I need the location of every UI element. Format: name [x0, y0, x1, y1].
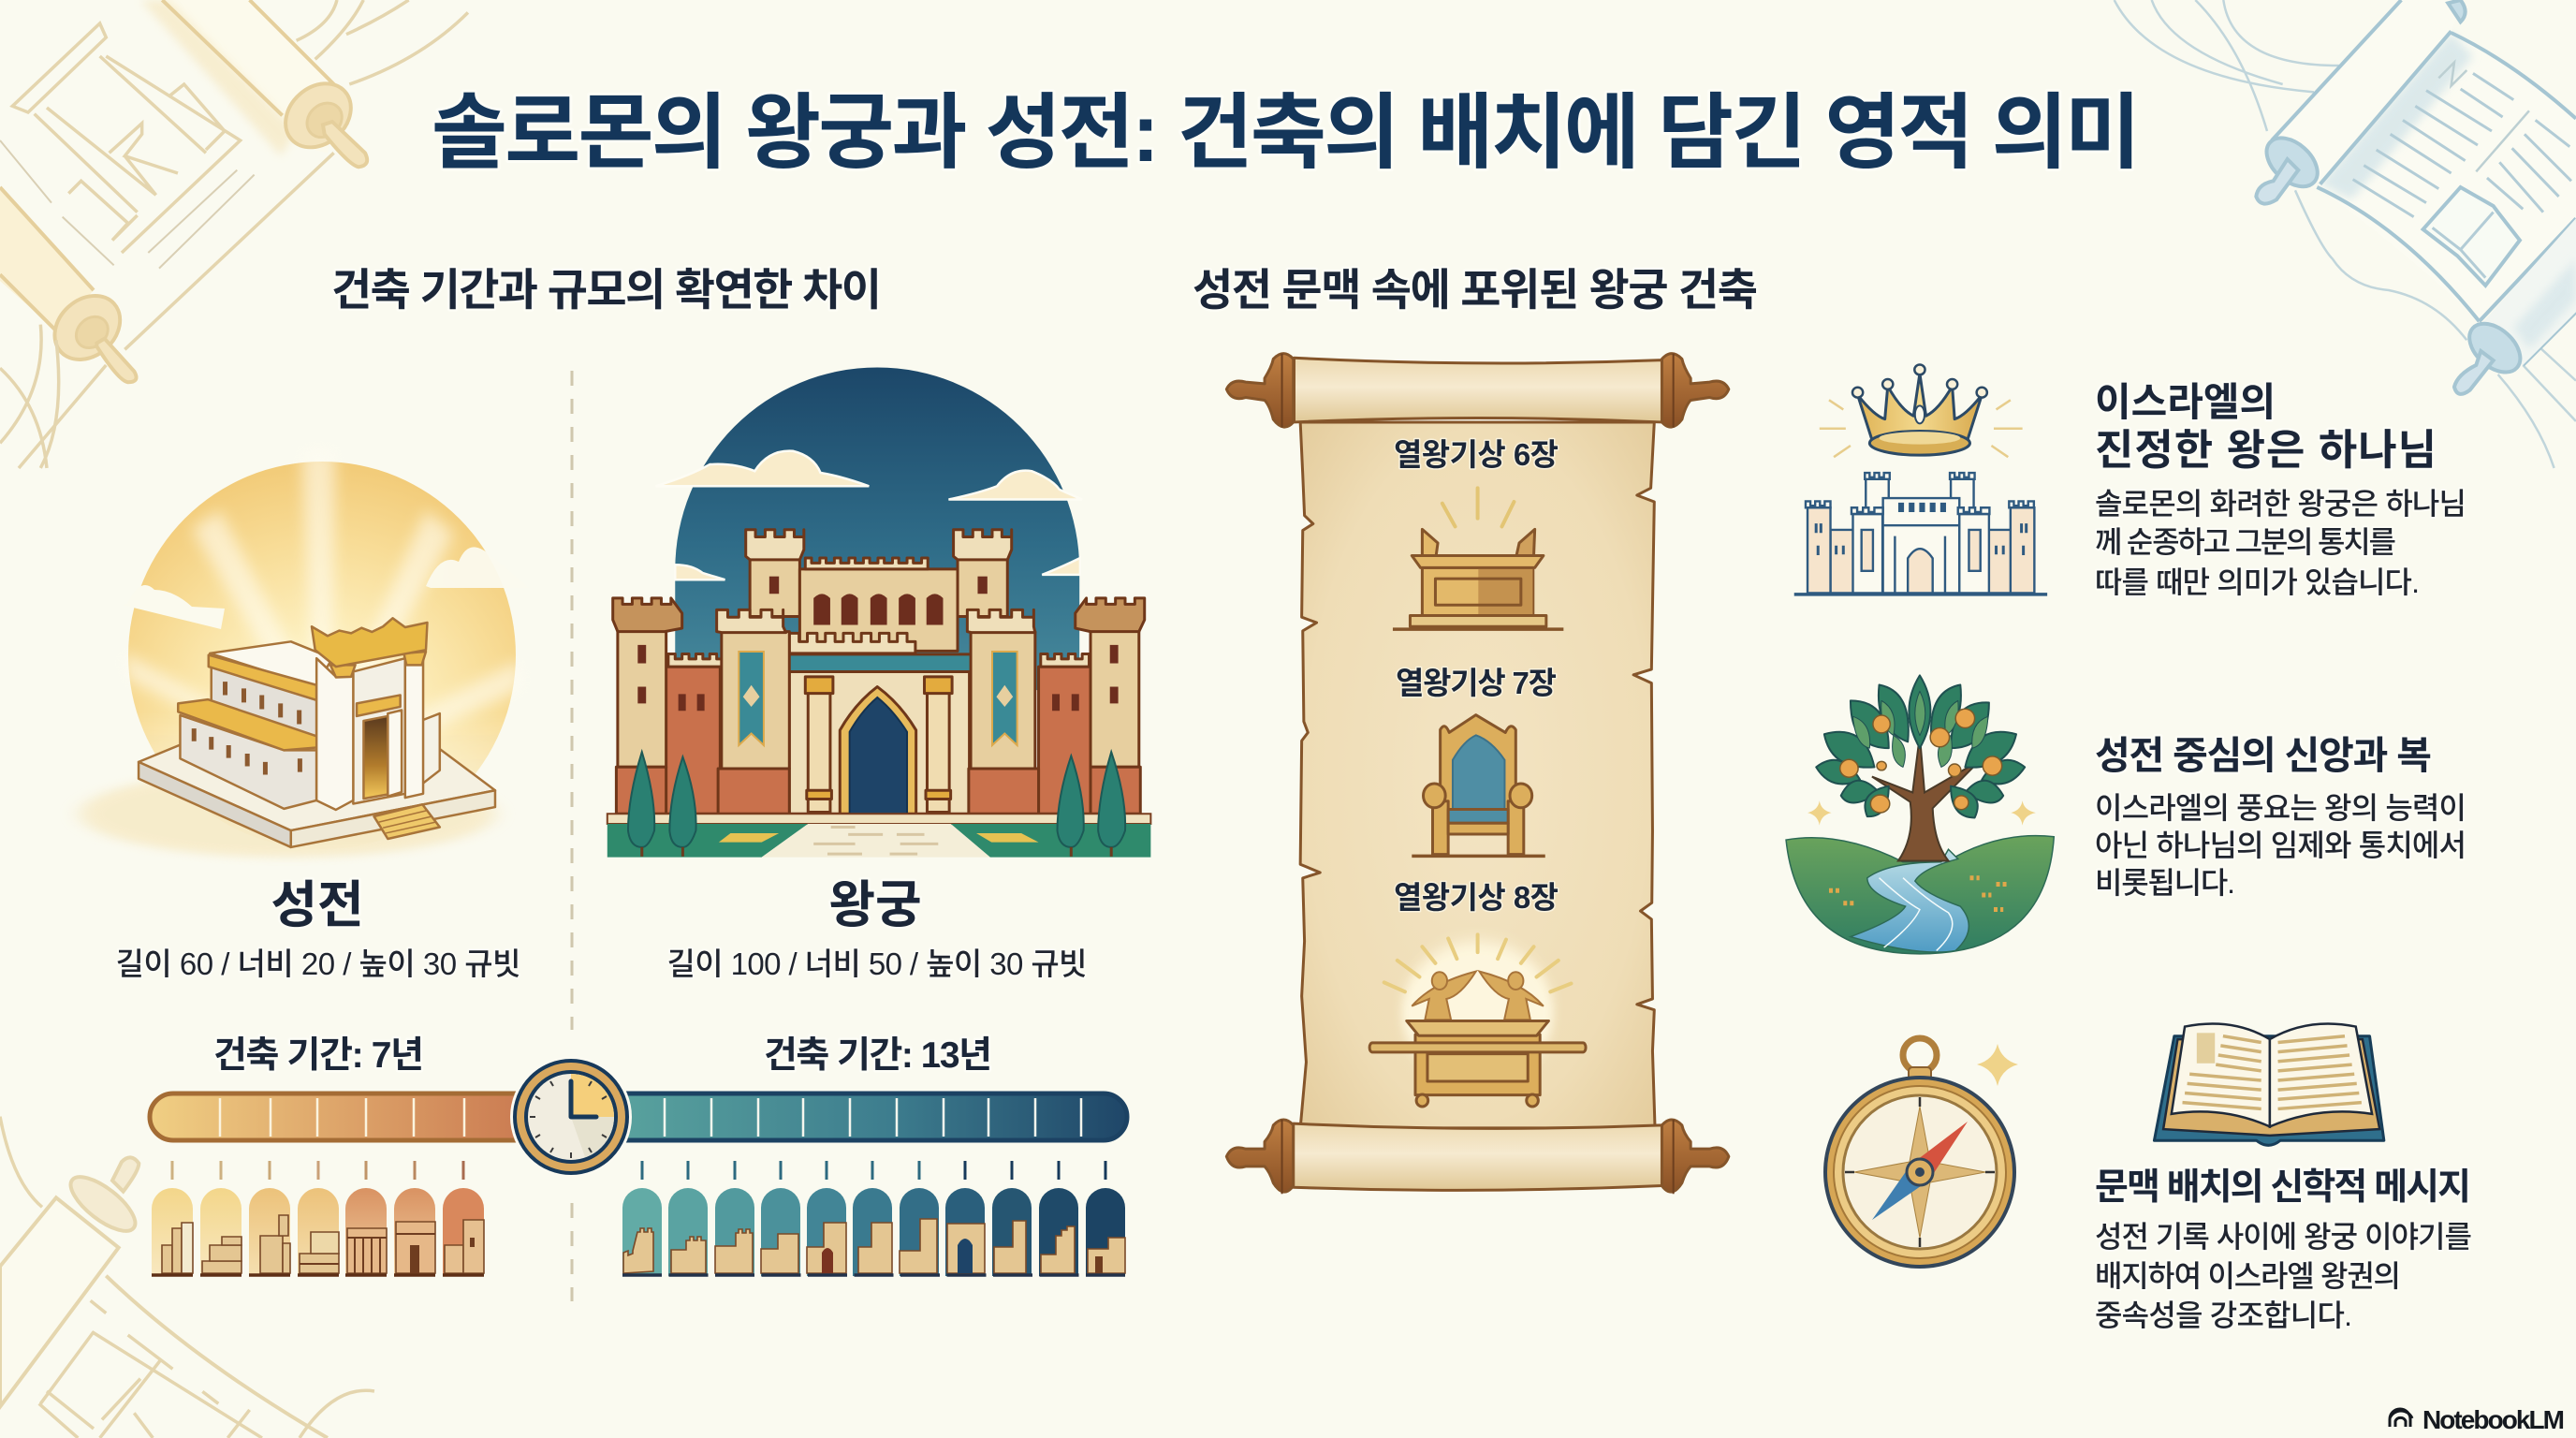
bar: seven year timeline	[150, 1093, 543, 1140]
text: temple centered faith	[2095, 734, 2466, 900]
label: temple build time: 건축 기간: 7년	[213, 1035, 424, 1076]
center dashed divider	[571, 371, 573, 1301]
logo	[2390, 1409, 2412, 1427]
arch backgrounds	[152, 1188, 484, 1276]
year tick marks	[172, 1161, 463, 1180]
platform	[139, 724, 495, 847]
center block	[789, 558, 958, 653]
palace dimensions: 길이 100 / 너비 50 / 높이 30 규빗	[666, 946, 1088, 981]
icon: clock	[510, 1056, 632, 1178]
palace year tiles	[622, 1161, 1125, 1276]
icon: ark of covenant	[1369, 934, 1586, 1107]
description	[2095, 791, 2466, 900]
clouds around sun	[122, 585, 225, 629]
upper block	[209, 641, 332, 741]
arch backgrounds	[622, 1188, 1125, 1276]
bar: thirteen year timeline	[599, 1093, 1127, 1140]
trunk	[1872, 736, 1980, 860]
side walls	[665, 654, 1090, 814]
chapter 8: 열왕기상 8장	[1394, 880, 1559, 915]
decoration: bottom-left plan scroll	[0, 1117, 374, 1438]
fruit	[1840, 709, 2002, 813]
hills	[1786, 836, 2054, 954]
illustration: palace	[607, 367, 1150, 858]
description: 비롯됩니다.	[2095, 866, 2235, 900]
description: 따를 때만 의미가 있습니다.	[2095, 565, 2420, 599]
upper towers	[746, 530, 1012, 617]
description	[2095, 1220, 2472, 1332]
lower block	[178, 699, 318, 809]
chapter 6: 열왕기상 6장	[1394, 437, 1559, 472]
heading line two: 진정한 왕은 하나님	[2095, 426, 2437, 474]
scroll: kings chapters 6 to 8	[1226, 354, 1729, 1194]
clouds	[656, 451, 1082, 580]
scroll chapter labels	[1394, 437, 1559, 915]
sun rays	[122, 449, 524, 758]
meadow flowers	[1829, 878, 2008, 910]
decoration: top-left blueprint scroll	[0, 0, 468, 468]
wordmark: NotebookLM	[2422, 1405, 2565, 1434]
castle outline	[1806, 473, 2034, 594]
text: theological message	[2095, 1167, 2472, 1332]
year tick marks	[642, 1161, 1105, 1180]
heading: temple context: 성전 문맥 속에 포위된 왕궁 건축	[1193, 265, 1758, 315]
growing palace buildings	[623, 1219, 1125, 1273]
crown	[1852, 364, 1987, 455]
icon: fruit tree and river	[1786, 675, 2054, 954]
description	[2095, 487, 2466, 599]
sparkles	[1808, 800, 2036, 826]
watermark: NotebookLM	[2390, 1405, 2565, 1434]
icon: crown over castle	[1794, 364, 2047, 594]
mid towers	[717, 609, 1039, 814]
growing temple buildings	[162, 1215, 484, 1273]
description: 중속성을 강조합니다.	[2095, 1299, 2352, 1332]
rays	[1820, 400, 2023, 457]
temple name: 성전	[271, 877, 364, 933]
temple dimensions: 길이 60 / 너비 20 / 높이 30 규빗	[116, 946, 520, 981]
heading: 이스라엘의	[2095, 380, 2276, 424]
sun disc	[128, 462, 516, 849]
icon: open book	[2154, 1024, 2384, 1145]
cypress trees	[628, 752, 1125, 857]
temple year tiles	[152, 1161, 484, 1276]
title: 솔로몬의 왕궁과 성전: 건축의 배치에 담긴 영적 의미	[432, 86, 2141, 179]
text: true king	[2095, 380, 2466, 599]
description: 솔로몬의 화려한 왕궁은 하나님	[2095, 487, 2466, 521]
gate	[787, 654, 972, 814]
sky dome	[675, 367, 1079, 690]
palace name: 왕궁	[828, 877, 922, 933]
bottom roller	[1226, 1120, 1729, 1194]
icon: throne	[1412, 715, 1545, 856]
baseline	[152, 1273, 484, 1277]
soft ground shadow	[80, 770, 495, 858]
label: palace	[666, 877, 1088, 981]
description: 이스라엘의 풍요는 왕의 능력이	[2095, 791, 2466, 825]
icon: altar	[1393, 488, 1563, 629]
label: temple	[116, 877, 520, 981]
icon: compass	[1825, 1038, 2014, 1267]
baseline	[622, 1273, 1125, 1277]
description: 배지하여 이스라엘 왕권의	[2095, 1259, 2401, 1293]
heading: 문맥 배치의 신학적 메시지	[2095, 1167, 2471, 1208]
river	[1851, 849, 1969, 952]
foliage	[1816, 675, 2025, 817]
description: 아닌 하나님의 임제와 통치에서	[2095, 829, 2466, 862]
parchment	[1300, 422, 1655, 1128]
icon: sparkle	[1977, 1044, 2018, 1086]
top roller	[1226, 354, 1729, 428]
heading: construction comparison: 건축 기간과 규모의 확연한 차이	[331, 265, 882, 315]
description: 께 순종하고 그분의 통치를	[2095, 525, 2396, 559]
outer towers	[613, 598, 1145, 814]
courtyard	[607, 814, 1150, 858]
heading: 성전 중심의 신앙과 복	[2095, 734, 2432, 777]
stairs	[374, 804, 440, 839]
chapter 7: 열왕기상 7장	[1396, 666, 1557, 700]
label: palace build time: 건축 기간: 13년	[764, 1035, 992, 1076]
decoration: top-right book scroll	[2115, 0, 2576, 468]
facade and door	[312, 618, 440, 810]
description: 성전 기록 사이에 왕궁 이야기를	[2095, 1220, 2472, 1254]
illustration: temple with sunburst	[80, 449, 529, 858]
